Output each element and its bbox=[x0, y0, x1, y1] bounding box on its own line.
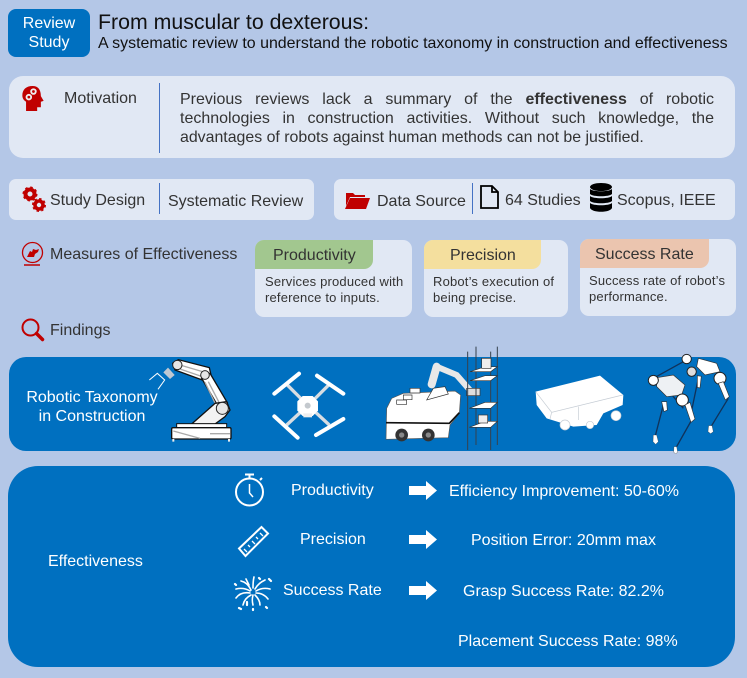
motivation text: in bbox=[282, 110, 295, 127]
divider bbox=[472, 183, 473, 214]
panel: motivation bbox=[9, 76, 735, 158]
64 studies: 64 Studies bbox=[505, 192, 581, 209]
badge: review study: Review bbox=[23, 15, 75, 32]
precision header: Precision bbox=[450, 247, 516, 264]
badge: review study bbox=[8, 9, 90, 57]
motivation text: effectiveness bbox=[525, 91, 627, 108]
icon: magnifier bbox=[22, 318, 44, 342]
productivity description bbox=[265, 274, 403, 305]
effectiveness label: Effectiveness bbox=[48, 553, 143, 570]
motivation label: Motivation bbox=[64, 90, 137, 107]
icon: drone bbox=[274, 374, 343, 438]
card: success rate bbox=[580, 239, 736, 316]
motivation text: the bbox=[692, 110, 714, 127]
productivity header bbox=[255, 240, 373, 269]
icon: measures bbox=[22, 242, 44, 266]
success rate row label: Success Rate bbox=[283, 582, 382, 599]
motivation text: lack bbox=[322, 91, 351, 108]
motivation text: of bbox=[464, 91, 477, 108]
precision description: being precise. bbox=[433, 290, 516, 305]
arrow bbox=[409, 530, 437, 549]
card: productivity bbox=[255, 240, 412, 317]
icon: fireworks bbox=[234, 576, 272, 612]
productivity description: reference to inputs. bbox=[265, 290, 380, 305]
systematic review: Systematic Review bbox=[168, 193, 303, 210]
icon: document bbox=[480, 185, 499, 209]
taxonomy label: in Construction bbox=[39, 408, 145, 425]
icon: robot arm bbox=[149, 360, 231, 442]
productivity description: Services produced with bbox=[265, 274, 403, 289]
success rate description bbox=[589, 273, 725, 304]
arrow bbox=[409, 581, 437, 600]
taxonomy label: Robotic Taxonomy bbox=[26, 389, 158, 406]
precision description: Robot’s execution of bbox=[433, 274, 554, 289]
icon: gears bbox=[22, 186, 46, 212]
motivation text: construction bbox=[308, 110, 394, 127]
panel: effectiveness bbox=[8, 466, 735, 667]
precision header bbox=[424, 240, 541, 269]
motivation text: the bbox=[490, 91, 513, 108]
panel: data source bbox=[334, 179, 735, 220]
success rate header bbox=[580, 239, 709, 268]
grasp result: Grasp Success Rate: 82.2% bbox=[463, 583, 664, 600]
badge: review study: Study bbox=[29, 34, 69, 51]
arrow bbox=[409, 481, 437, 500]
motivation text: summary bbox=[385, 91, 451, 108]
panel: study design bbox=[9, 179, 314, 220]
motivation text: of bbox=[640, 91, 653, 108]
measures of effectiveness label: Measures of Effectiveness bbox=[50, 246, 237, 263]
card: precision bbox=[424, 240, 568, 317]
efficiency result: Efficiency Improvement: 50-60% bbox=[449, 483, 679, 500]
icon: folder bbox=[345, 193, 370, 209]
icon: database bbox=[590, 183, 612, 212]
icon: stopwatch bbox=[235, 474, 264, 506]
motivation text: technologies bbox=[180, 110, 270, 127]
icon: head with gears bbox=[22, 86, 44, 111]
success rate description: Success rate of robot’s bbox=[589, 273, 725, 288]
motivation text: robotic bbox=[666, 91, 714, 108]
data source label: Data Source bbox=[377, 193, 466, 210]
scopus ieee: Scopus, IEEE bbox=[617, 192, 716, 209]
motivation text: knowledge, bbox=[598, 110, 679, 127]
productivity row label: Productivity bbox=[291, 482, 374, 499]
divider bbox=[159, 83, 160, 153]
productivity header: Productivity bbox=[273, 247, 356, 264]
success rate description: performance. bbox=[589, 289, 668, 304]
motivation text bbox=[180, 91, 714, 146]
icon: ruler bbox=[238, 526, 270, 558]
motivation text: Previous bbox=[180, 91, 242, 108]
title: From muscular to dexterous: bbox=[98, 10, 369, 34]
icon: quadruped robot bbox=[648, 354, 729, 454]
motivation text: activities. bbox=[406, 110, 472, 127]
findings label: Findings bbox=[50, 322, 110, 339]
motivation text: such bbox=[552, 110, 586, 127]
precision row label: Precision bbox=[300, 531, 366, 548]
precision description bbox=[433, 274, 554, 305]
motivation text: a bbox=[364, 91, 373, 108]
icon: mobile robot platform bbox=[536, 376, 623, 430]
success rate header: Success Rate bbox=[595, 246, 694, 263]
subtitle: A systematic review to understand the robotic taxonomy in construction and effectiveness bbox=[98, 35, 728, 52]
position error result: Position Error: 20mm max bbox=[471, 532, 656, 549]
panel: robotic taxonomy bbox=[9, 357, 736, 451]
motivation text: Without bbox=[485, 110, 539, 127]
divider bbox=[159, 183, 160, 214]
icon: mobile manipulator bbox=[386, 347, 497, 450]
motivation text: reviews bbox=[255, 91, 309, 108]
study design label: Study Design bbox=[50, 192, 145, 209]
motivation text: advantages of robots against human methods can not be justified. bbox=[180, 129, 644, 146]
taxonomy label bbox=[26, 389, 158, 425]
placement result: Placement Success Rate: 98% bbox=[458, 633, 678, 650]
